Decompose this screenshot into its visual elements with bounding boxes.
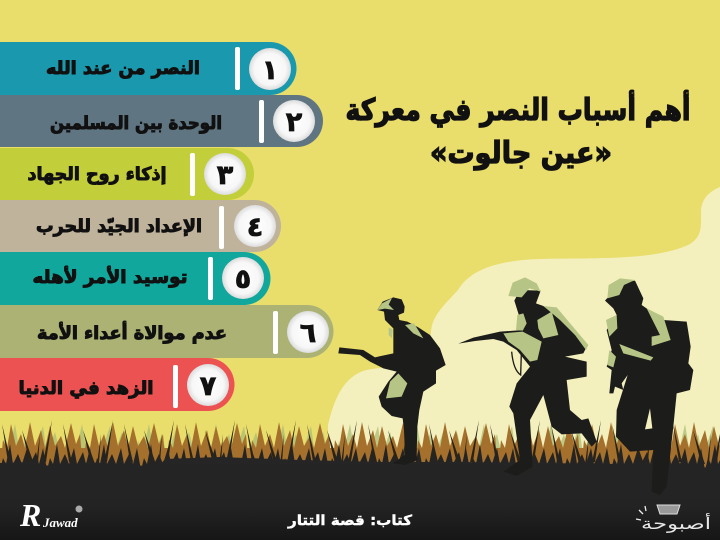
soldiers [338, 277, 693, 495]
dark ground [0, 457, 720, 540]
item 5: ٥ [235, 264, 251, 295]
item 4: الإعداد الجيّد للحرب [36, 216, 202, 237]
title: «عين جالوت» [430, 136, 612, 171]
list of reasons [0, 42, 334, 411]
source credit: كتاب: قصة التتار [287, 513, 413, 529]
item 7 [0, 358, 234, 411]
item 7: ٧ [200, 371, 217, 402]
grass [0, 418, 720, 472]
soldier: right [605, 278, 693, 495]
logo: Osbouha: أصبوحة [641, 513, 711, 534]
item 6 [0, 305, 334, 358]
signature: R Jawad: R [19, 497, 41, 533]
item 2: الوحدة بين المسلمين [50, 113, 222, 134]
item 6: ٦ [300, 318, 316, 349]
item 1: ١ [262, 55, 278, 86]
item 5: توسيد الأمر لأهله [32, 266, 188, 288]
item 3: ٣ [217, 160, 234, 191]
item 4: ٤ [247, 212, 263, 243]
item 2 [0, 95, 323, 147]
logo: Osbouha [636, 505, 711, 534]
item 3 [0, 148, 254, 200]
soldier: left [338, 297, 446, 465]
item 1 [0, 42, 296, 95]
item 1: النصر من عند الله [46, 58, 200, 79]
item 6: عدم موالاة أعداء الأمة [37, 321, 227, 344]
item 7: الزهد في الدنيا [18, 378, 154, 399]
item 3: إذكاء روح الجهاد [28, 164, 166, 185]
item 2: ٢ [286, 107, 303, 138]
soldier: middle [458, 277, 597, 476]
signature: R Jawad: Jawad [42, 515, 78, 530]
title [346, 90, 690, 171]
signature: R Jawad [19, 497, 82, 533]
item 4 [0, 200, 281, 252]
light hill shape behind soldiers [328, 187, 720, 480]
item 5 [0, 252, 270, 305]
